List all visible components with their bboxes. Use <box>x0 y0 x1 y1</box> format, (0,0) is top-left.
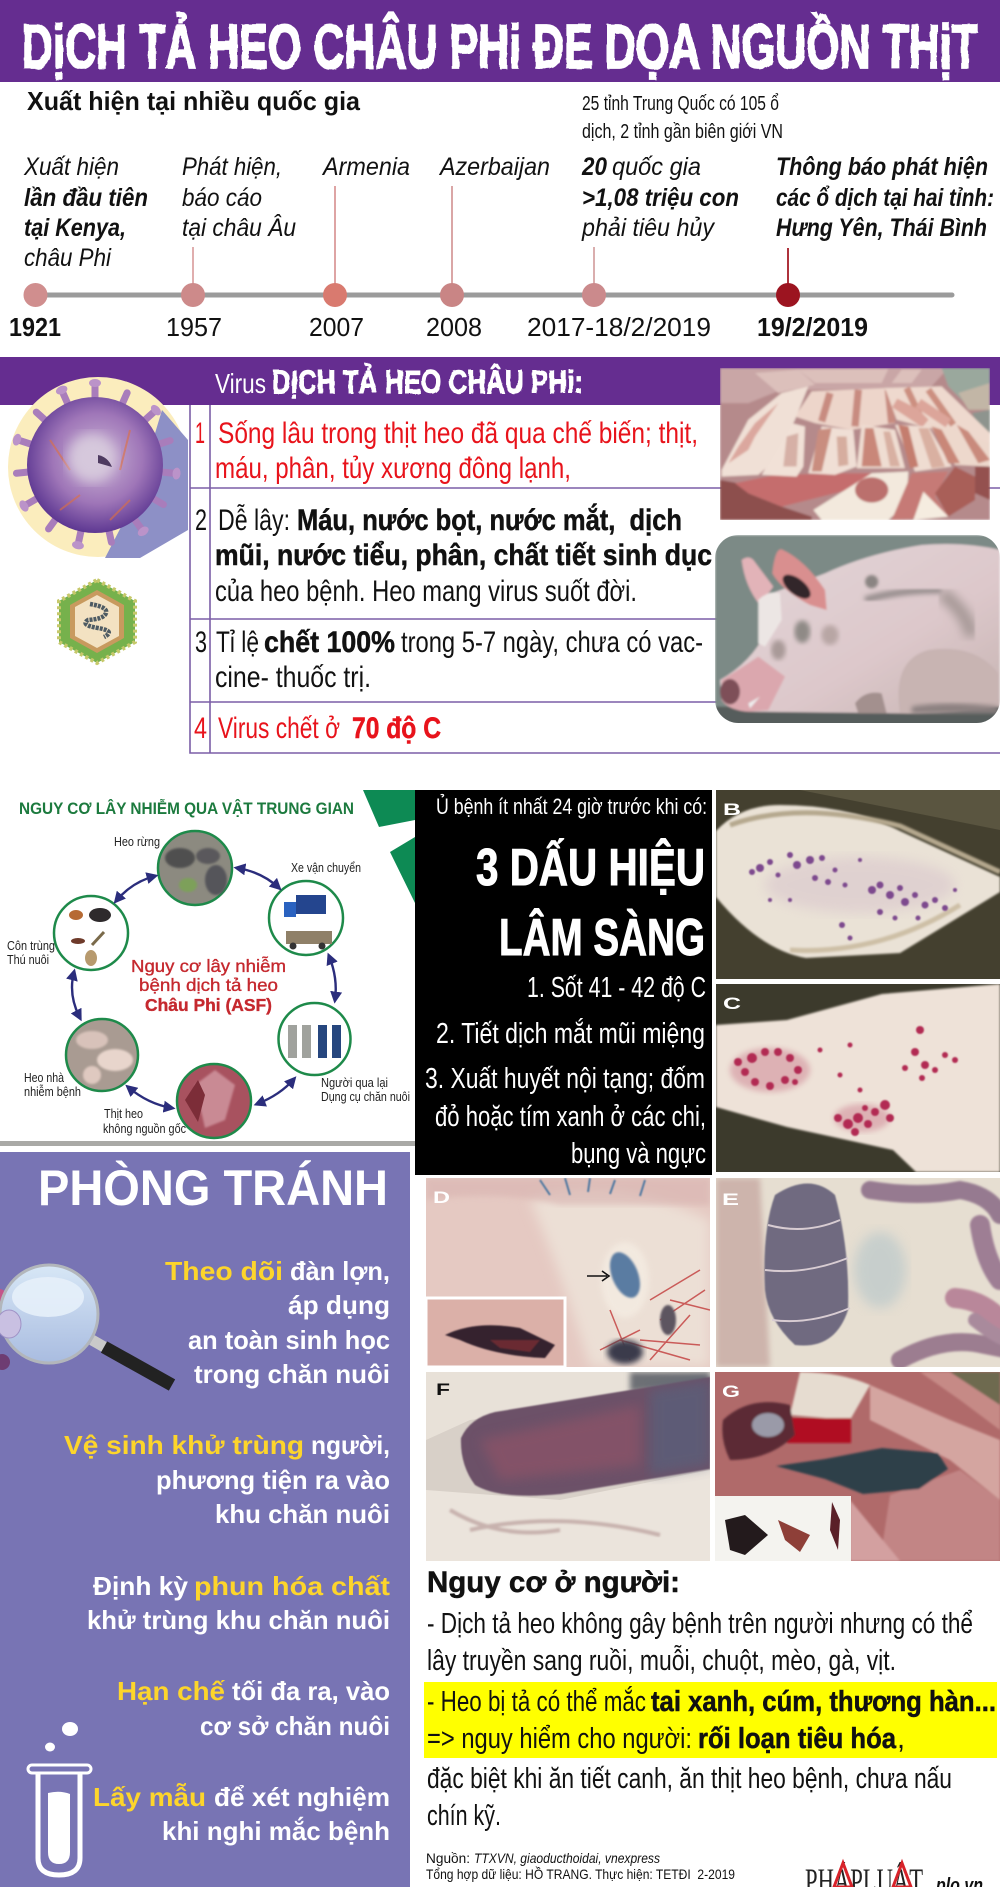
timeline note: China: 25 tỉnh Trung Quốc có 105 ổ <box>582 93 779 115</box>
event 2008 <box>426 153 550 342</box>
panel: timeline <box>9 86 994 342</box>
source credits: Tổng hợp dữ liệu: HỒ TRANG. Thực hiện: TETĐI 2-2019 <box>426 1865 735 1882</box>
tip: limit access: Hạn chế <box>117 1676 226 1706</box>
risk text: consumption <box>427 1763 952 1832</box>
timeline heading: Xuất hiện tại nhiều quốc gia <box>27 86 361 116</box>
tip: monitoring: đàn lợn, <box>290 1256 390 1286</box>
event 2007 <box>309 153 410 342</box>
fact 3: Tỉ lệ <box>216 626 259 659</box>
tip: limit access: tối đa ra, vào <box>232 1676 390 1706</box>
clinical signs list: 3. Xuất huyết nội tạng; đốm <box>425 1063 705 1095</box>
label B: B <box>723 800 741 819</box>
event 1957: tại châu Âu <box>182 213 296 242</box>
event 2008: Azerbaijan <box>438 153 550 181</box>
fact 1: Sống lâu trong thịt heo đã qua chế biến; thịt, <box>218 417 698 450</box>
risk callout highlight: , <box>897 1723 905 1755</box>
event 1957 <box>166 153 296 342</box>
event 1921: châu Phi <box>24 244 112 272</box>
tip: sampling: khi nghi mắc bệnh <box>162 1816 390 1846</box>
incubation note: Ủ bệnh ít nhất 24 giờ trước khi có: <box>436 794 707 819</box>
risk callout highlight: - Heo bị tả có thể mắc <box>427 1685 646 1718</box>
clinical signs heading: LÂM SÀNG <box>499 908 705 967</box>
photo: sick pig <box>715 535 1000 723</box>
label D: D <box>433 1188 450 1207</box>
prevention heading: PHÒNG TRÁNH <box>38 1160 388 1216</box>
node: unknown-origin pork: không nguồn gốc <box>103 1121 186 1136</box>
photo G: abdominal organs <box>715 1372 1000 1561</box>
risk text: transmission <box>427 1608 973 1677</box>
fact 4: 70 độ C <box>352 712 441 745</box>
node: insects and pets <box>7 896 128 970</box>
tip: sampling <box>93 1782 390 1846</box>
node: transport <box>269 860 361 955</box>
fact 3: trong 5-7 ngày, chưa có vac- <box>401 626 703 659</box>
event 1957: 1957 <box>166 312 222 342</box>
timeline axis <box>35 292 952 298</box>
photo C: skin lesions <box>716 984 1000 1172</box>
tip: chemical spraying: khử trùng khu chăn nuôi <box>87 1605 390 1635</box>
icon: virus structure diagram <box>59 580 135 663</box>
event 1957: báo cáo <box>182 184 262 212</box>
label G: G <box>722 1382 740 1401</box>
diagram title: NGUY CƠ LÂY NHIỄM QUA VẬT TRUNG GIAN <box>19 799 354 818</box>
node: insects and pets: Thú nuôi <box>7 952 49 967</box>
node: wild boar <box>114 831 232 905</box>
clinical signs list: 1. Sốt 41 - 42 độ C <box>527 972 706 1004</box>
tip: monitoring: trong chăn nuôi <box>194 1359 390 1389</box>
tip: chemical spraying: Định kỳ <box>93 1571 189 1601</box>
fact 2 <box>195 503 712 608</box>
source credits: Nguồn: <box>426 1850 470 1866</box>
fact 3: chết 100% <box>264 626 395 659</box>
photo E: kidney and intestines <box>716 1178 1000 1367</box>
node: infected domestic pigs: nhiễm bệnh <box>24 1084 81 1099</box>
fact 2: 2 <box>195 504 207 537</box>
risk heading: Nguy cơ ở người: <box>427 1566 680 1599</box>
event 2008: 2008 <box>426 312 482 342</box>
fact 1: 1 <box>195 417 205 450</box>
event 2017-2019: quốc gia <box>612 153 701 181</box>
fact 3: cine- thuốc trị. <box>215 661 371 694</box>
panel: virus facts table <box>190 405 1000 753</box>
fact 4: Virus chết ở <box>218 712 340 745</box>
transmission arrows <box>72 868 336 1108</box>
panel: prevention <box>0 1152 410 1887</box>
source credits: TTXVN, giaoducthoidai, vnexpress <box>474 1850 660 1866</box>
fact 4: 4 <box>194 712 207 745</box>
panel: human risk <box>424 1566 997 1832</box>
risk callout highlight: rối loạn tiêu hóa <box>698 1723 897 1755</box>
virus heading: DỊCH TẢ HEO CHÂU PHi: <box>272 364 583 400</box>
photo F: enlarged spleen <box>426 1372 710 1561</box>
tip: disinfection: phương tiện ra vào <box>156 1465 390 1495</box>
event 1921 <box>9 153 148 342</box>
diagram corner decoration <box>363 790 415 903</box>
event 2017-2019: phải tiêu hủy <box>581 214 715 242</box>
event 2017-2019: >1,08 triệu con <box>582 184 739 212</box>
node: people: Người qua lại <box>321 1075 388 1090</box>
fact 2: mũi, nước tiểu, phân, chất tiết sinh dục <box>215 539 712 572</box>
photo B: skin lesions <box>716 790 1000 979</box>
label E: E <box>722 1190 739 1209</box>
diagram centre label: Nguy cơ lây nhiễm <box>131 955 286 976</box>
diagram centre label: bệnh dịch tả heo <box>139 975 278 995</box>
fact 2: Dễ lây: <box>218 504 290 537</box>
event 2007: Armenia <box>321 153 410 181</box>
timeline note: China: dịch, 2 tỉnh gần biên giới VN <box>582 121 783 143</box>
fact 1: máu, phân, tủy xương đông lạnh, <box>215 452 571 485</box>
title band <box>0 0 1000 82</box>
diagram centre label: Châu Phi (ASF) <box>145 995 272 1015</box>
panel: transmission diagram <box>0 790 415 1146</box>
timeline note: China <box>582 93 783 143</box>
label C: C <box>723 994 741 1013</box>
event 1921: Xuất hiện <box>23 153 119 181</box>
node: transport: Xe vận chuyển <box>291 860 361 875</box>
event 1921: tại Kenya, <box>24 214 126 242</box>
fact 2: của heo bệnh. Heo mang virus suốt đời. <box>215 575 637 608</box>
clinical signs list: 2. Tiết dịch mắt mũi miệng <box>436 1017 705 1050</box>
clinical signs heading <box>476 838 705 967</box>
node: people: Dụng cụ chăn nuôi <box>321 1089 410 1104</box>
fact 1 <box>195 417 698 485</box>
tip: chemical spraying <box>87 1571 390 1635</box>
node: unknown-origin pork <box>103 1064 251 1138</box>
lesion arrow <box>587 1271 609 1281</box>
event 19/2/2019: 19/2/2019 <box>757 312 868 342</box>
photo: sliced pork <box>720 368 990 520</box>
tip: disinfection: Vệ sinh khử trùng <box>64 1430 304 1460</box>
tip: monitoring: an toàn sinh học <box>188 1325 390 1355</box>
risk callout highlight <box>424 1682 997 1758</box>
fact 3: 3 <box>195 626 207 659</box>
risk text: consumption: chín kỹ. <box>427 1800 501 1832</box>
panel: virus heading band <box>0 357 1000 405</box>
risk callout highlight: => nguy hiểm cho người: <box>427 1723 692 1755</box>
icon: test tube <box>28 1722 91 1875</box>
event 1957: Phát hiện, <box>182 153 282 181</box>
event 2017-2019: 2017-18/2/2019 <box>527 312 711 342</box>
event 1921: lần đầu tiên <box>24 184 148 212</box>
label F: F <box>436 1380 450 1399</box>
event 2007: 2007 <box>309 312 364 342</box>
photo D: internal lesion <box>426 1178 710 1367</box>
node: wild boar: Heo rừng <box>114 834 160 849</box>
tip: limit access: cơ sở chăn nuôi <box>200 1711 390 1741</box>
node: infected domestic pigs: Heo nhà <box>24 1070 65 1085</box>
node: people <box>278 1003 410 1104</box>
tip: sampling: để xét nghiệm <box>214 1782 390 1812</box>
node: infected domestic pigs <box>24 1019 138 1099</box>
event 2017-2019: 20 <box>581 153 607 181</box>
event 2017-2019 <box>527 153 739 342</box>
node: unknown-origin pork: Thịt heo <box>104 1106 143 1121</box>
event 19/2/2019 <box>757 153 994 342</box>
tip: disinfection <box>64 1430 390 1529</box>
tip: sampling: Lấy mẫu <box>93 1782 206 1812</box>
fact 2: Máu, nước bọt, nước mắt, dịch <box>297 503 682 537</box>
clinical signs list: đỏ hoặc tím xanh ở các chi, <box>435 1101 706 1133</box>
node: insects and pets: Côn trùng <box>7 938 55 953</box>
tip: monitoring <box>165 1256 390 1389</box>
source credits <box>426 1850 735 1882</box>
tip: chemical spraying: phun hóa chất <box>194 1571 390 1601</box>
virus heading: Virus <box>215 368 266 399</box>
event 1921: 1921 <box>9 312 61 342</box>
fact 4 <box>194 712 441 745</box>
diagram centre label <box>131 955 286 1015</box>
clinical signs list <box>425 972 706 1170</box>
clinical signs list: bụng và ngực <box>571 1138 706 1170</box>
clinical signs heading: 3 DẤU HIỆU <box>476 838 705 897</box>
tip: monitoring: Theo dõi <box>165 1256 283 1286</box>
fact 3 <box>195 626 703 694</box>
tip: limit access <box>117 1676 390 1741</box>
tip: monitoring: áp dụng <box>288 1290 390 1320</box>
icon: virus illustration <box>8 377 188 558</box>
icon: magnifying glass <box>0 1265 172 1385</box>
tip: disinfection: khu chăn nuôi <box>215 1499 390 1529</box>
panel: clinical signs <box>415 790 712 1175</box>
tip: disinfection: người, <box>311 1430 390 1460</box>
